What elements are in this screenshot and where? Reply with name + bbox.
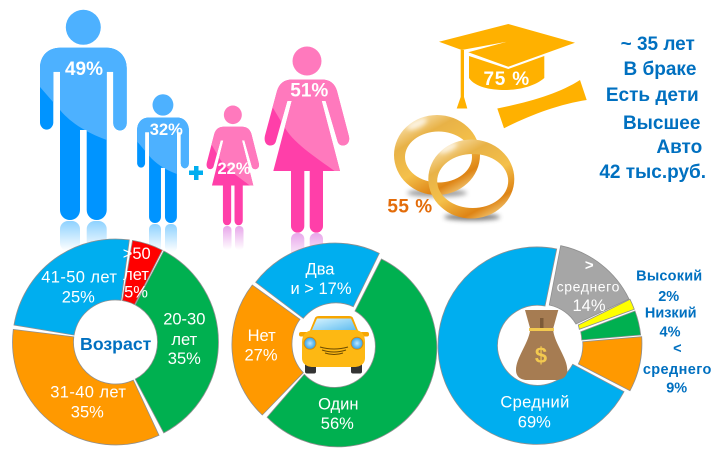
summary text list: Авто <box>656 137 702 158</box>
icon: wedding rings 55% <box>387 115 514 220</box>
labels: age: лет <box>171 331 198 349</box>
labels: cars: Нет <box>248 327 276 345</box>
icon: money bag <box>516 310 567 380</box>
segment: high <box>578 299 634 329</box>
figure: girl 22%: 22% <box>217 160 251 178</box>
labels: income outside: Низкий <box>645 306 697 322</box>
segment: 20-30 <box>135 251 218 433</box>
summary text list: ~ 35 лет <box>621 34 695 55</box>
labels: income inside: среднего <box>557 279 620 295</box>
labels: income inside: 69% <box>518 414 551 432</box>
figure: boy 32%: 32% <box>150 121 183 139</box>
labels: age: >50 <box>123 245 151 263</box>
labels: cars: 56% <box>321 415 354 433</box>
icon: graduation cap 75% <box>439 24 587 128</box>
segment: above average <box>549 246 629 324</box>
labels: age <box>41 245 205 422</box>
labels: age: 31-40 лет <box>50 384 126 402</box>
labels: income inside: Средний <box>500 394 570 412</box>
labels: income inside: > <box>585 257 594 274</box>
segment: low <box>581 311 641 340</box>
segment: none <box>232 285 303 415</box>
summary text list: 42 тыс.руб. <box>599 162 706 183</box>
icon: graduation cap 75%: 75 % <box>483 69 530 90</box>
center label: age: Возраст <box>80 334 152 354</box>
icon: plus <box>189 166 203 180</box>
labels: age: 25% <box>62 289 95 307</box>
segment: over 50 <box>122 240 162 305</box>
labels: income outside: 2% <box>658 289 679 305</box>
segment: 31-40 <box>13 329 159 445</box>
segment: two or more <box>256 243 379 318</box>
figure: girl 22% <box>207 105 259 225</box>
segment: below average <box>578 337 642 391</box>
labels: cars: 27% <box>244 347 278 365</box>
figure: woman 51% <box>265 46 349 233</box>
labels: age: лет <box>123 266 149 284</box>
labels: age: 5% <box>124 284 148 302</box>
donut chart: age <box>13 239 218 445</box>
icon: wedding rings 55%: 55 % <box>387 196 433 218</box>
donut chart: cars <box>232 243 437 447</box>
labels: income inside <box>500 257 620 432</box>
labels: income outside: среднего <box>643 362 712 378</box>
summary text list: Есть дети <box>606 85 699 106</box>
icon: car <box>299 316 369 374</box>
icon: money bag: $ <box>535 343 547 368</box>
summary text list <box>599 34 706 183</box>
labels: income outside <box>636 269 712 397</box>
labels: cars: Один <box>318 395 359 413</box>
labels: income outside: 9% <box>666 381 687 397</box>
segment: one <box>267 259 437 447</box>
labels: cars: и > 17% <box>290 280 352 298</box>
figure: boy 32% <box>137 94 189 223</box>
labels: age: 35% <box>168 350 201 368</box>
segment: 41-50 <box>14 239 129 335</box>
labels: income outside: < <box>673 341 682 357</box>
figure: man 49% <box>40 10 127 220</box>
labels: cars: Два <box>306 260 335 278</box>
labels: income inside: 14% <box>572 297 606 315</box>
labels: age: 20-30 <box>163 310 205 328</box>
summary text list: В браке <box>624 59 696 80</box>
donut chart: income <box>438 246 712 444</box>
figure: man 49%: 49% <box>65 59 103 80</box>
segment: average <box>438 247 624 444</box>
reflections under figures <box>60 221 323 261</box>
labels: age: 41-50 лет <box>41 268 117 286</box>
labels: income outside: 4% <box>660 325 681 341</box>
labels: income outside: Высокий <box>636 269 702 285</box>
summary text list: Высшее <box>623 113 700 134</box>
labels: cars <box>244 260 359 433</box>
labels: age: 35% <box>71 404 104 422</box>
figure: woman 51%: 51% <box>290 80 328 102</box>
